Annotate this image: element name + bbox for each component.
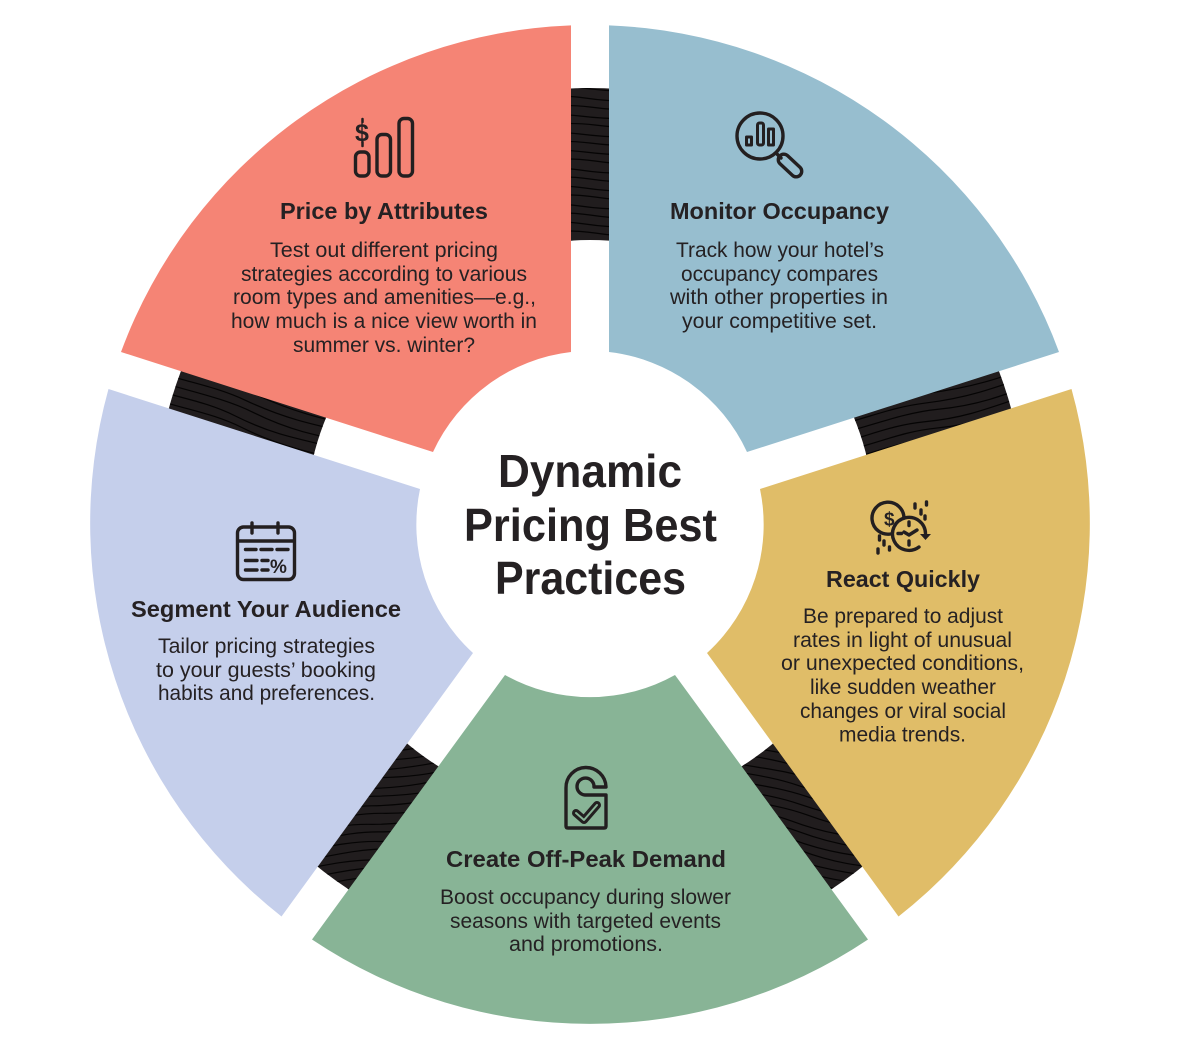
text: segment your audience description: habits and preferences.: [158, 682, 375, 705]
text: segment your audience description: to your guests’ booking: [156, 659, 376, 682]
text: react quickly description: rates in light of unusual: [793, 629, 1012, 652]
text: create off-peak demand description: and promotions.: [509, 933, 663, 956]
title: Practices: [495, 552, 686, 604]
title: [464, 445, 717, 604]
text: monitor occupancy description: [669, 239, 888, 333]
text: react quickly description: [781, 605, 1024, 746]
panel: react quickly: [707, 389, 1090, 916]
panel: price by attributes: [121, 25, 571, 452]
panel: monitor occupancy: [609, 25, 1059, 452]
icon: coin, clock and rain: [872, 502, 931, 553]
text: price by attributes description: summer vs. winter?: [293, 334, 475, 357]
text: monitor occupancy description: Track how your hotel’s: [676, 239, 884, 262]
icon: dollar sign and rising bars: $: [355, 119, 369, 147]
icon: calendar with percent: %: [270, 557, 287, 578]
text: react quickly description: media trends.: [839, 724, 966, 746]
text: segment your audience description: [156, 635, 376, 705]
text: react quickly description: or unexpected conditions,: [781, 652, 1024, 675]
text: react quickly description: like sudden weather: [810, 676, 996, 699]
icon: coin, clock and rain: $: [884, 510, 895, 530]
text: create off-peak demand description: [440, 886, 731, 956]
text: react quickly description: Be prepared to adjust: [803, 605, 1003, 628]
text: price by attributes description: how much is a nice view worth in: [231, 310, 537, 333]
panel: segment your audience: [90, 389, 473, 916]
text: monitor occupancy description: your competitive set.: [682, 310, 877, 333]
text: react quickly description: changes or viral social: [800, 700, 1006, 723]
title: Pricing Best: [464, 499, 717, 551]
text: monitor occupancy description: occupancy compares: [681, 263, 878, 286]
heading: react quickly: React Quickly: [826, 566, 980, 592]
text: monitor occupancy description: with other properties in: [669, 286, 888, 309]
icon: door hanger with check: [566, 767, 606, 828]
icon: calendar with percent: [238, 523, 294, 580]
panel: create off-peak demand: [312, 675, 868, 1024]
icon: dollar sign and rising bars: [355, 118, 412, 176]
textured black ring behind the segments: [168, 88, 1012, 890]
text: price by attributes description: room types and amenities—e.g.,: [233, 286, 536, 309]
title: Dynamic: [498, 445, 682, 497]
text: create off-peak demand description: Boost occupancy during slower: [440, 886, 731, 909]
text: price by attributes description: Test out different pricing: [270, 239, 498, 262]
heading: segment your audience: Segment Your Audience: [131, 596, 401, 622]
text: price by attributes description: [231, 239, 537, 357]
text: segment your audience description: Tailor pricing strategies: [158, 635, 375, 658]
heading: create off-peak demand: Create Off-Peak Demand: [446, 846, 726, 872]
text: price by attributes description: strategies according to various: [241, 263, 527, 286]
text: create off-peak demand description: seasons with targeted events: [450, 910, 721, 933]
heading: monitor occupancy: Monitor Occupancy: [670, 198, 889, 224]
heading: price by attributes: Price by Attributes: [280, 198, 488, 224]
icon: magnifying glass over bar chart: [737, 113, 804, 179]
